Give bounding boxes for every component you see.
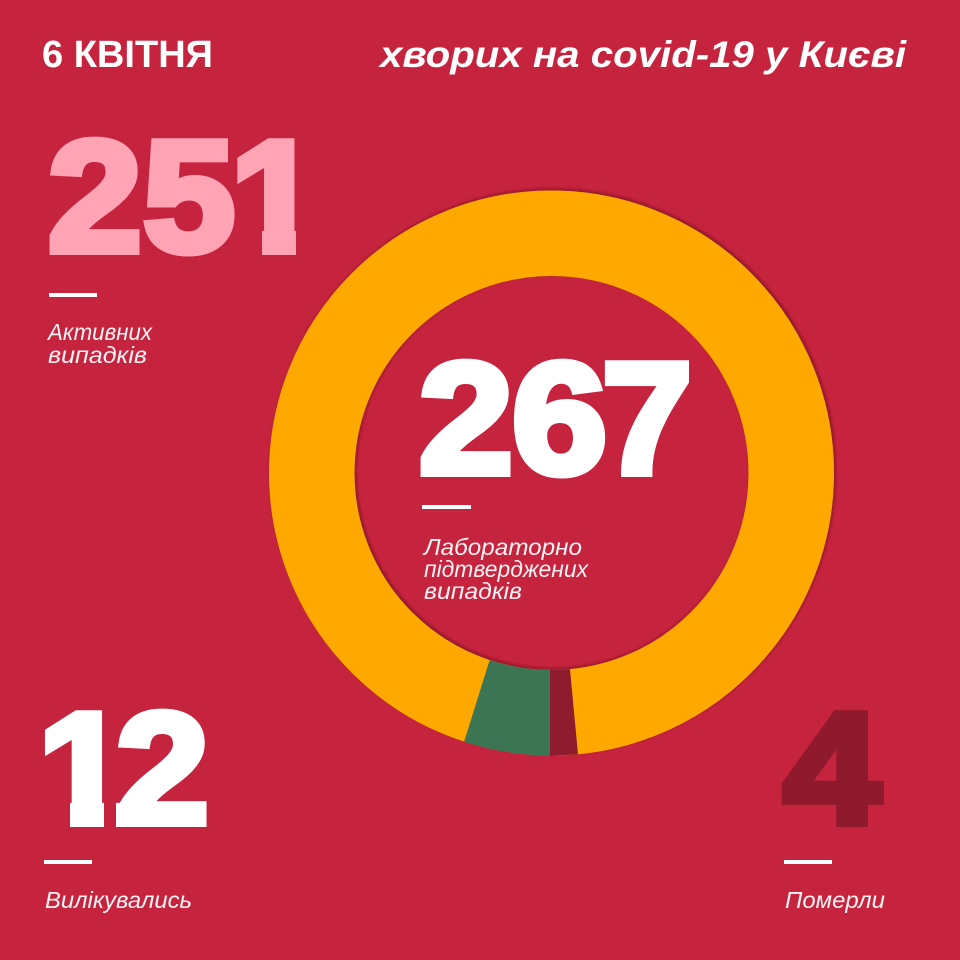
segment: recovered <box>464 660 550 756</box>
stat: confirmed cases: 6 <box>512 331 607 507</box>
date heading: 6 КВІТНЯ <box>42 34 213 76</box>
stat: recovered: Вилікувались <box>45 887 192 913</box>
title: хворих на covid-19 у Києві <box>378 34 907 75</box>
stat: active cases: 1 <box>230 109 320 285</box>
donut chart <box>312 233 791 756</box>
stat: active cases: 5 <box>143 109 235 285</box>
stat: confirmed cases: 7 <box>602 331 692 507</box>
stat: deaths: 4 <box>784 681 881 857</box>
stat: recovered <box>30 681 209 913</box>
stat: active cases <box>46 109 326 368</box>
segment: active <box>312 233 791 713</box>
stat: active cases: Активних <box>46 319 153 345</box>
stat: recovered: 1 <box>38 681 128 857</box>
stat: recovered: 2 <box>116 681 209 857</box>
stat: confirmed cases <box>419 331 692 604</box>
stat: deaths: Померли <box>785 887 885 913</box>
stat: active cases: 2 <box>48 109 142 285</box>
stat: confirmed cases: 2 <box>419 331 513 507</box>
stat: confirmed cases: підтверджених <box>424 556 589 582</box>
stat: confirmed cases: Лабораторно <box>422 534 582 560</box>
stat: confirmed cases: випадків <box>424 578 522 604</box>
stat: active cases: випадків <box>48 342 147 368</box>
stat: deaths <box>784 681 885 913</box>
segment: deaths <box>550 669 578 756</box>
